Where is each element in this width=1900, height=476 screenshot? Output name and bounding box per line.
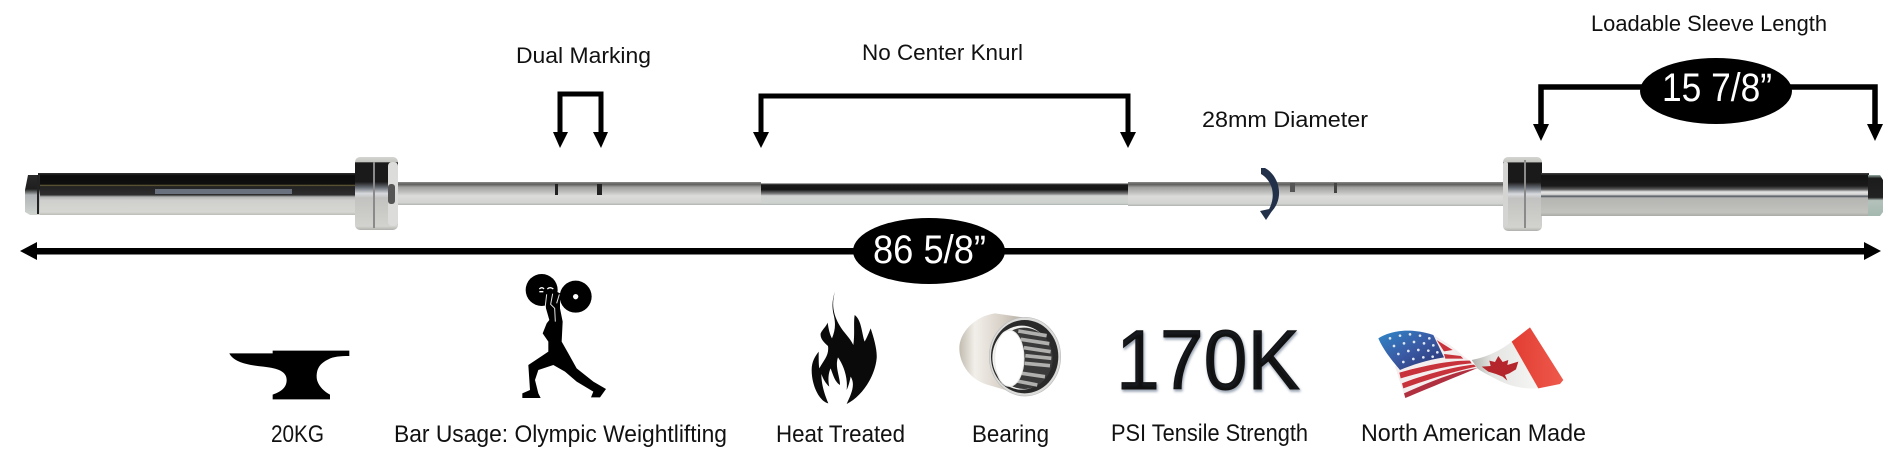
label: heat treated: Heat Treated bbox=[776, 421, 905, 448]
bar shaft bbox=[398, 182, 1503, 206]
total length badge: 86 5/8” bbox=[873, 228, 986, 272]
label: PSI tensile strength: PSI Tensile Strength bbox=[1111, 420, 1308, 447]
left collar bbox=[355, 157, 398, 230]
label: north american made: North American Made bbox=[1361, 420, 1586, 447]
icon: anvil bbox=[229, 351, 349, 399]
total length badge bbox=[853, 218, 1005, 284]
28mm diameter label: 28mm Diameter bbox=[1202, 107, 1368, 132]
no center knurl label: No Center Knurl bbox=[862, 40, 1023, 65]
total length arrow bbox=[20, 218, 1881, 284]
label: bar usage: Bar Usage: Olympic Weightlifting bbox=[394, 421, 727, 448]
loadable sleeve length label: Loadable Sleeve Length bbox=[1591, 11, 1827, 36]
label: 20KG: 20KG bbox=[271, 421, 324, 448]
icon: flame bbox=[812, 292, 877, 404]
sleeve length badge bbox=[1640, 58, 1792, 124]
170K figure: 170K bbox=[1116, 313, 1300, 407]
icon: US and Canada flags bbox=[1378, 327, 1563, 398]
barbell photo bbox=[25, 157, 1883, 231]
right sleeve bbox=[1541, 173, 1883, 216]
sleeve length bracket bbox=[1533, 58, 1883, 141]
icon: needle bearing bbox=[959, 313, 1061, 396]
label: bearing: Bearing bbox=[972, 421, 1049, 448]
dual marking label: Dual Marking bbox=[516, 43, 651, 68]
left sleeve bbox=[25, 173, 356, 215]
dual marking bracket arrows bbox=[553, 94, 608, 148]
no center knurl bracket arrows bbox=[753, 96, 1136, 148]
right collar bbox=[1503, 157, 1542, 231]
icon: weightlifter bbox=[522, 274, 606, 398]
curved rotation arrow bbox=[1260, 168, 1279, 220]
sleeve length badge: 15 7/8” bbox=[1662, 66, 1772, 110]
